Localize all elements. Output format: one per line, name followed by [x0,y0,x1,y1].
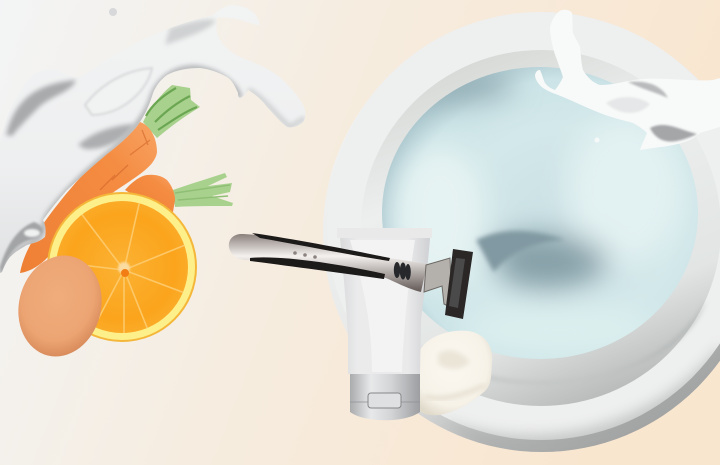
razor grip top [252,233,390,261]
cream dollop [418,331,492,415]
razor grip ribs [394,262,411,280]
razor blade head [445,249,473,319]
razor dots [293,251,317,259]
orange segments [82,203,184,333]
milk splash left [0,5,305,275]
orange slice [47,192,197,342]
tube cap [350,374,420,420]
tube body [340,238,430,374]
egg [8,247,112,365]
milk splash on jar [535,10,720,150]
milk droplet [594,138,600,142]
cream jar [323,12,720,465]
cream surface [382,67,698,359]
carrot greens [143,85,200,138]
front carrot [20,85,200,273]
carrot greens [173,173,233,207]
jar inner wall [361,50,720,406]
back carrot [125,173,233,212]
milk grey folds [6,80,76,136]
cosmetic tube [337,228,432,420]
razor neck [424,258,452,308]
jar outer rim [323,14,720,452]
cream highlights [395,145,485,285]
tube crimp [337,228,432,238]
razor grip bottom [250,257,385,279]
razor handle [229,234,427,292]
milk edge shading [0,68,240,275]
razor [229,233,473,319]
milk droplet [109,8,117,16]
cream dark swirl [490,233,610,290]
